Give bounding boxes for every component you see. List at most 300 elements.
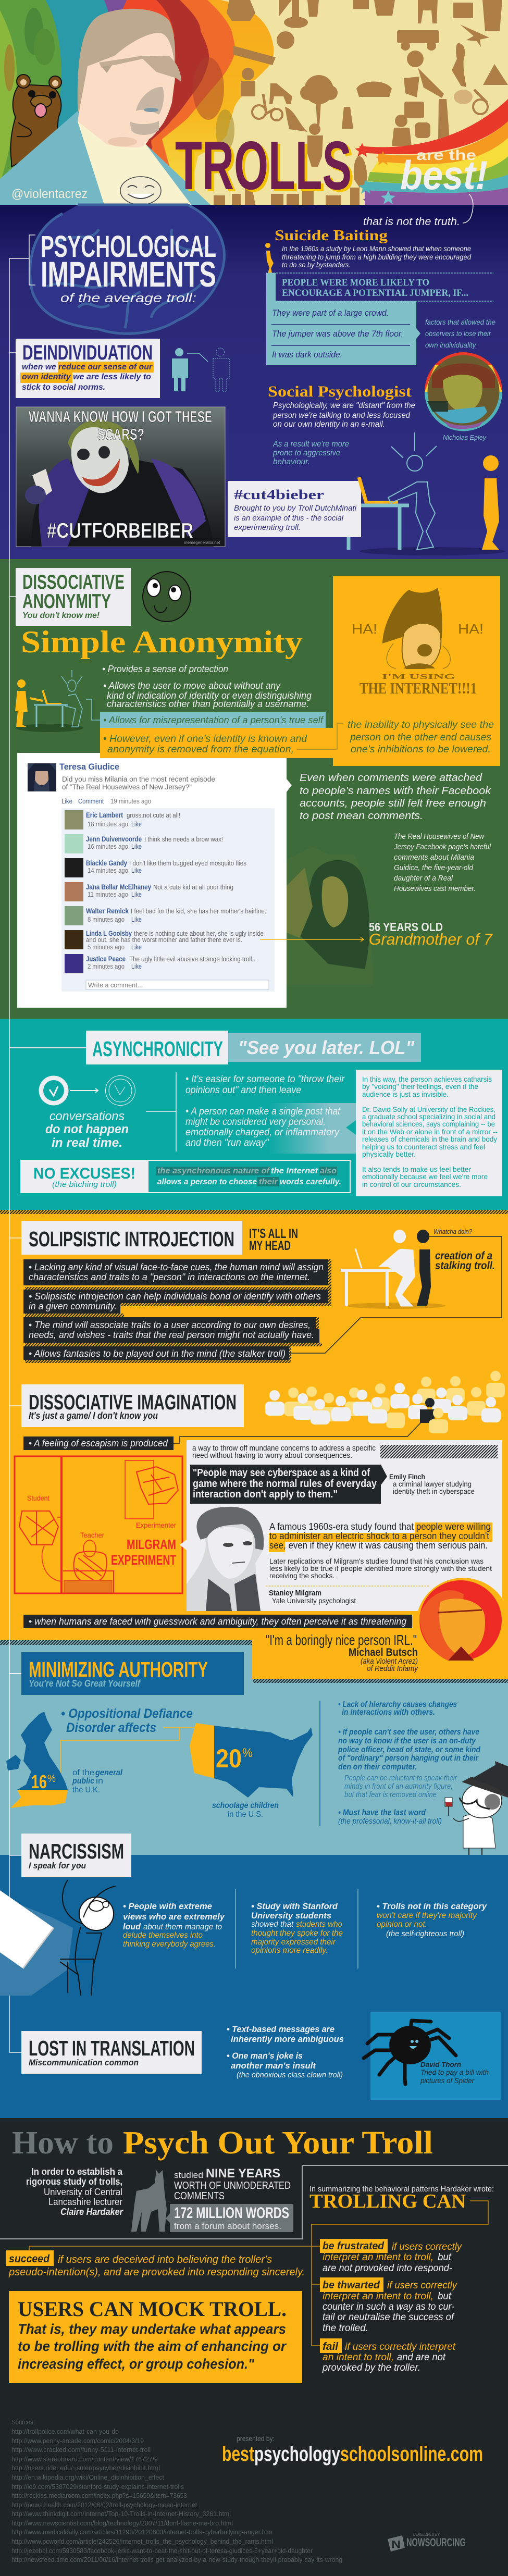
panel: asynchronicity heading: [9, 1031, 421, 1064]
text: oppositional defiance: Disorder affects: [66, 1720, 156, 1735]
panel: facebook comment screenshot: gross,not cute at all!: [127, 811, 180, 819]
text: be thwarted: tail or neutralise the success of: [323, 2312, 455, 2323]
text: narcissism column 1: views who are extremely: [123, 1912, 226, 1922]
text: be frustrated: if users correctly: [392, 2241, 462, 2252]
panel: bullets with gradient pointer: emotionally charged, or inflammatory: [185, 1127, 340, 1138]
text: sources: http://www.cracked.com/funny-5111-internet-troll: [11, 2446, 151, 2454]
panel: milgram study and quote: Yale University psychologist: [272, 1596, 356, 1605]
frame around study: [0, 2165, 508, 2239]
text: minimizing authority bullets: of "ordinary" person hanging out in their: [338, 1754, 479, 1763]
panel: toy silhouettes: [214, 0, 508, 205]
text: sources: Sources:: [11, 2418, 35, 2426]
text: succeed: if users are deceived into believing the troller's: [58, 2254, 272, 2265]
panel: catharsis note: it on the Web or alone in front of a mirror --: [362, 1128, 498, 1136]
panel: suicide baiting: ENCOURAGE A POTENTIAL JUMPER, IF...: [282, 288, 468, 299]
panel: facebook comment screenshot: of "The Real Housewives of New Jersey?": [62, 783, 192, 791]
portrait: Nicholas Epley: [425, 352, 502, 441]
logo: nowsourcing: N: [391, 2539, 401, 2550]
panel: asynchronicity heading: ASYNCHRONICITY: [92, 1037, 223, 1061]
heading: trolling can: In summarizing the behavioral patterns Hardaker wrote:: [309, 2185, 494, 2194]
text: sources: http://www.medicaldaily.com/articles/11293/20120803/internet-trolls-cyberbullying-anger.htm: [11, 2528, 272, 2536]
text: housewives note: [393, 832, 491, 893]
map: US 20 percent: %: [242, 1746, 253, 1760]
text: lost in translation bullets: (the obnoxious class clown troll): [237, 2071, 343, 2079]
panel: narcissism heading: I speak for you: [29, 1861, 86, 1871]
panel: milgram study and quote: Later replications of Milgram's studies found that his conclusion was: [269, 1557, 484, 1565]
panel: facebook comment screenshot: The ugly little evil abusive strange looking troll..: [129, 955, 255, 963]
title: Trolls are the best: best!: [400, 152, 488, 198]
header note: that is not the truth: [363, 194, 473, 228]
panel: milgram experiment diagram: Experimenter: [136, 1521, 176, 1529]
text: even when comments were attached: accounts, people still felt free enough: [300, 798, 486, 809]
icon: table flip meme: [0, 1880, 116, 1996]
panel: facebook comment screenshot: Linda L Goolsby: [86, 929, 132, 937]
text: fail: if users correctly interpret: [345, 2342, 456, 2352]
panel: facebook comment screenshot: Teresa Giudice: [59, 762, 119, 772]
text: narcissism column 2: thought they spoke for the: [251, 1929, 343, 1938]
timeline over teal: [9, 1019, 10, 1214]
icon: stalker at computer with connector: creation of a: [435, 1250, 492, 1262]
map: UK 16 percent: [6, 1712, 122, 1808]
map: UK 16 percent: the U.K.: [72, 1786, 100, 1794]
panel: lost in translation heading: LOST IN TRANSLATION: [29, 2036, 195, 2060]
panel: no excuses: [20, 1160, 350, 1193]
timeline over orange: [9, 1210, 10, 1640]
text: sources: http://jezebel.com/5930583/facebook-jerks-want-to-beat-the-shit-out-of-teresa-giudices-5+year+old-daughter: [11, 2547, 313, 2555]
panel: cut4bieber: Brought to you by Troll DutchMinati: [234, 504, 357, 513]
panel: facebook comment screenshot: Like: [131, 843, 142, 850]
panel: milgram study and quote: Stanley Milgram: [269, 1589, 321, 1597]
panel: milgram study and quote: interaction don't apply to them.": [193, 1489, 338, 1500]
panel: milgram study and quote: receiving the shocks.: [269, 1571, 334, 1580]
map: UK 16 percent: in: [96, 1777, 103, 1786]
callout: 56 years old grandmother of 7: 56 YEARS OLD: [369, 920, 443, 934]
text: be frustrated: interpret an intent to troll,: [323, 2252, 433, 2263]
text: minimizing authority bullets: but that fear is removed online: [344, 1790, 437, 1799]
text: study intro: University of Central: [44, 2187, 122, 2197]
text: nine years of comments: COMMENTS: [174, 2190, 225, 2202]
panel: users can mock troll: [9, 2291, 302, 2383]
re-draw of timeline line over green: [9, 559, 10, 1019]
panel: bullets with gradient pointer: opinions out" and then leave: [185, 1085, 301, 1096]
text: housewives note: comments about Milania: [394, 853, 474, 862]
panel: milgram study and quote: A famous 1960s-era study found that people were willing: [269, 1521, 491, 1532]
panel: facebook comment screenshot: 5 minutes ago: [88, 943, 125, 951]
panel: facebook comment screenshot: Write a comment...: [88, 981, 143, 989]
panel: deindividuation: when we reduce our sense of our: [22, 363, 153, 371]
text: be thwarted: be thwarted: [323, 2280, 380, 2291]
text: be thwarted: [320, 2277, 457, 2334]
map: US 20 percent: 20: [216, 1744, 242, 1773]
panel: solipsistic bullets: [23, 1259, 331, 1363]
text: simple anonymity bullets: characteristics other than potentially a username.: [107, 699, 309, 709]
section background: solipsistic introjection and dissociative imagination: [0, 1210, 508, 1679]
text: nine years of comments: studied: [174, 2170, 203, 2180]
panel: milgram study and quote: [180, 1440, 502, 1611]
text: sources: http://trollpolice.com/what-can-you-do: [11, 2428, 119, 2435]
text: minimizing authority bullets: police officer, head of state, or some kind: [338, 1745, 481, 1754]
text: nine years of comments: [166, 2166, 293, 2232]
text: minimizing authority bullets: [320, 1700, 481, 1826]
panel: no excuses: words carefully.: [280, 1178, 341, 1186]
panel: suicide baiting: factors that allowed the: [425, 318, 495, 326]
text: housewives note: Jersey Facebook page's hateful: [393, 843, 491, 851]
panel: facebook comment screenshot: Jenn Duivenvoorde: [86, 835, 142, 843]
text: even when comments were attached: to people's names with their Facebook: [300, 785, 491, 797]
text: study intro: Claire Hardaker: [60, 2207, 123, 2217]
panel: facebook comment screenshot: [17, 753, 292, 1008]
panel: solipsistic bullets: characteristics and traits to a "person" in interactions on the internet.: [29, 1272, 310, 1282]
panel: suicide baiting: In the 1960s a study by Leon Mann showed that when someone: [282, 244, 471, 253]
text: conversations do not happen in real time: conversations: [49, 1109, 125, 1123]
panel: allows misrepresentation strip: • Allows for misrepresentation of a person's true self: [103, 715, 324, 725]
panel: milgram study and quote: identity theft in cyberspace: [393, 1487, 475, 1495]
text: narcissism column 1: [123, 1901, 226, 1949]
panel: lost in translation heading: [21, 2031, 202, 2074]
portrait: man with glasses: [0, 9, 210, 205]
text: be thwarted: counter in such a way as to cur-: [323, 2301, 454, 2312]
panel: catharsis note: in control of our circumstances.: [362, 1180, 461, 1188]
map: UK 16 percent: %: [47, 1773, 56, 1785]
panel: narcissism heading: NARCISSISM: [29, 1839, 124, 1863]
timeline over dark blue: [9, 1855, 21, 2052]
logo: nowsourcing: [388, 2532, 466, 2552]
header background: [0, 0, 508, 205]
text: narcissism column 2: University students: [251, 1911, 331, 1921]
heading: simple anonymity: Simple Anonymity: [21, 625, 303, 659]
map: US 20 percent: [190, 1723, 313, 1819]
panel: spider: Tried to pay a bill with: [420, 2068, 489, 2076]
icon: like a sir gentleman: [445, 1761, 508, 1855]
text: housewives note: Housewives cast member.: [394, 884, 476, 893]
panel: solipsistic bullets: • Solipsistic introjection can help individuals bond or identify with others: [29, 1291, 321, 1302]
section heading: psychological impairments: [29, 230, 216, 305]
panel: suicide baiting: Suicide Baiting: [275, 227, 388, 244]
panel: catharsis note: audience is just as invisible.: [362, 1090, 449, 1098]
icon: scribble meme face: [143, 572, 191, 622]
panel: catharsis note: behavioral sciences, says complaining -- be: [362, 1120, 495, 1128]
text: even when comments were attached: Even when comments were attached: [300, 772, 482, 784]
panel: minimizing authority heading: MINIMIZING AUTHORITY: [29, 1657, 208, 1681]
text: be frustrated: be frustrated: [323, 2240, 385, 2252]
panel: rainbow behind portrait: [0, 0, 274, 205]
text: narcissism column 2: students who: [296, 1920, 342, 1929]
panel: dissociative imagination heading: DISSOCIATIVE IMAGINATION: [29, 1390, 237, 1414]
panel: facebook comment screenshot: 14 minutes ago: [88, 866, 128, 874]
panel: catharsis note: by "voicing" their feelings, even if the: [362, 1082, 478, 1091]
panel: users can mock troll: That is, they may undertake what appears: [18, 2321, 286, 2337]
panel: facebook comment screenshot: Comment: [78, 797, 104, 805]
quote: Michael Butsch: "I'm a boringly nice person IRL.": [266, 1632, 417, 1648]
map: US 20 percent: in the U.S.: [228, 1810, 263, 1819]
panel: dissociative anonymity heading: [9, 568, 131, 626]
panel: deindividuation: stick to social norms.: [22, 383, 105, 392]
panel: cut4bieber: #cut4bieber: [234, 487, 324, 502]
text: housewives note: daughter of a Real: [394, 874, 453, 883]
panel: dissociative imagination heading: It's just a game/ I don't know you: [29, 1410, 158, 1421]
panel: facebook comment screenshot: 18 minutes ago: [88, 820, 128, 828]
panel: milgram study and quote: to administer an electric shock to a person they couldn't: [269, 1531, 489, 1541]
panel: cut4bieber: [228, 481, 361, 537]
panel: deindividuation: own identity we are less likely to: [22, 373, 151, 381]
panel: asynchronicity heading: "See you later. LOL": [238, 1037, 415, 1058]
callout: 56 years old grandmother of 7: Grandmother of 7: [369, 930, 493, 948]
text: minimizing authority bullets: minds in front of an authority figure,: [344, 1782, 453, 1791]
text: minimizing authority bullets: (the professorial, know-it-all troll): [338, 1817, 442, 1826]
map: US 20 percent: schoolage children: [212, 1801, 279, 1810]
panel: facebook comment screenshot: Like: [131, 915, 142, 923]
portrait: Michael Butsch: [416, 1578, 508, 1679]
text: sources: [11, 2418, 342, 2563]
portrait: Nicholas Epley: Nicholas Epley: [443, 434, 487, 441]
text: narcissism column 2: showed that: [251, 1920, 294, 1929]
panel: facebook comment screenshot: 16 minutes ago: [88, 843, 128, 850]
panel: no excuses: their: [259, 1178, 278, 1186]
logo: bestpsychologyschoolsonline.com: presented by:: [237, 2434, 275, 2443]
text: succeed: [6, 2250, 305, 2278]
handle text: @violentacrez: [11, 187, 88, 201]
panel: milgram study and quote: game where the normal rules of everyday: [193, 1478, 377, 1490]
text: study intro: Lancashire lecturer: [48, 2197, 122, 2207]
panel: spider: David Thorn: [420, 2060, 461, 2069]
text: conversations do not happen in real time: do not happen: [45, 1122, 129, 1136]
panel: solipsistic heading: MY HEAD: [249, 1239, 291, 1253]
text: narcissism column 1: thinking everybody agrees.: [123, 1940, 216, 1949]
panel: social psychologist: person we're talking to and less focused: [272, 411, 411, 420]
panel: facebook comment screenshot: Justice Peace: [86, 955, 126, 963]
quote: Michael Butsch: [266, 1632, 418, 1673]
panel: facebook comment screenshot: Like: [131, 890, 142, 898]
panel: facebook comment screenshot: 8 minutes ago: [88, 915, 125, 923]
panel: solipsistic heading: IT'S ALL IN: [249, 1227, 298, 1241]
icon: solid and dashed person: [172, 348, 229, 391]
panel: facebook comment screenshot: I feel bad for the kid, she has her mother's hairline.: [131, 907, 266, 915]
panel: solipsistic heading: [9, 1221, 298, 1255]
text: sources: http://www.stereoboard.com/content/view/176727/9: [11, 2455, 158, 2463]
panel: facebook comment screenshot: 19 minutes ago: [110, 797, 151, 805]
panel: facebook comment screenshot: Walter Remick: [86, 907, 129, 915]
panel: deindividuation: [9, 339, 160, 398]
text: minimizing authority bullets: in interactions with others.: [342, 1708, 435, 1717]
text: nine years of comments: from a forum about horses.: [174, 2221, 281, 2231]
text: housewives note: The Real Housewives of New: [394, 832, 485, 841]
section heading: psychological impairments: of the average troll:: [60, 291, 196, 305]
text: be thwarted: interpret an intent to troll,: [323, 2291, 433, 2302]
text: lost in translation bullets: • One man's joke is: [227, 2051, 303, 2061]
text: narcissism column 3: won't care if they're majority: [377, 1911, 477, 1920]
title: Trolls are the best: are the: [416, 147, 476, 163]
hatch stripes: [0, 1640, 508, 1683]
text: sources: http://io9.com/5387029/stanford-study-explains-internet-trolls: [11, 2483, 184, 2491]
text: housewives note: Guidice, the five-year-old: [394, 863, 474, 872]
quote: Michael Butsch: of Reddit Infamy: [367, 1664, 418, 1673]
section background: narcissism: [0, 1855, 508, 2118]
panel: facebook comment screenshot: 2 minutes ago: [88, 962, 125, 970]
panel: catharsis note: physically better.: [362, 1150, 416, 1158]
icon: stalker at computer with connector: stalking troll.: [435, 1260, 495, 1272]
section background: how to psych out: [0, 2118, 508, 2576]
panel: cut4bieber: experimenting troll.: [234, 523, 301, 532]
text: narcissism column 2: majority expressed their: [251, 1938, 336, 1947]
panel: facebook comment screenshot: Did you miss Milania on the most recent episode: [62, 775, 215, 783]
logo: bestpsychologyschoolsonline.com: best: [222, 2443, 254, 2466]
panel: solipsistic bullets: • The mind will associate traits to a user according to our own desires,: [29, 1320, 311, 1330]
panel: facebook comment screenshot: Like: [131, 962, 142, 970]
text: minimizing authority bullets: • Must have the last word: [338, 1807, 426, 1817]
panel: I'm using the internet meme: person on the other end causes: [350, 732, 492, 743]
text: lost in translation bullets: another man's insult: [231, 2061, 316, 2071]
heading: how to psych out your troll: How to: [12, 2125, 114, 2161]
text: sources: http://www.penny-arcade.com/comic/2004/3/19: [11, 2437, 144, 2445]
panel: suicide baiting: threatening to jump from a high building they were encouraged: [282, 253, 472, 261]
panel: I'm using the internet meme: [296, 576, 500, 766]
image: joker meme: WANNA KNOW HOW I GOT THESE: [29, 407, 212, 426]
text: succeed: pseudo-intention(s), and are provoked into responding sincerely.: [8, 2267, 305, 2278]
section background: minimizing authority left part: [0, 1640, 252, 1683]
panel: solipsistic bullets: • Allows fantasies to be played out in the mind (the stalker troll): [29, 1348, 286, 1359]
panel: spider: [364, 2012, 501, 2100]
text: succeed: succeed: [9, 2253, 50, 2265]
panel: milgram study and quote: a way to throw off mundane concerns to address a specific: [192, 1444, 376, 1453]
icon: crowd of people: [265, 1371, 505, 1433]
icon: computer and bystander small: [15, 670, 100, 732]
panel: suicide baiting: own individuality.: [425, 341, 477, 349]
panel: escapism bullet: [23, 1422, 421, 1450]
panel: milgram study and quote: Emily Finch: [389, 1472, 425, 1481]
text: lost in translation bullets: • Text-based messages are: [227, 2024, 334, 2034]
icon: brain: [30, 205, 224, 333]
panel: dissociative anonymity heading: ANONYMITY: [22, 590, 111, 613]
text: sources: http://users.rider.edu/~suler/psycyber/disinhibit.html: [11, 2464, 160, 2472]
panel: catharsis note: a graduate school specializing in social and: [362, 1112, 495, 1121]
panel: milgram study and quote: see, even if they knew it was causing them serious pain.: [269, 1540, 488, 1551]
text: minimizing authority bullets: den on their computer.: [338, 1763, 417, 1772]
panel: dissociative imagination heading: [9, 1384, 244, 1427]
panel: cut4bieber: is an example of this - the social: [234, 514, 344, 523]
panel: social psychologist: prone to aggressive: [272, 449, 340, 457]
quote: Michael Butsch: (aka Violent Acrez): [361, 1657, 418, 1666]
text: sources: http://www.newscientist.com/blog/technology/2007/11/dont-flame-me-bro.html: [11, 2519, 233, 2527]
map: UK 16 percent: 16: [31, 1771, 47, 1792]
image: joker meme: #CUTFORBEIBER: [47, 518, 193, 542]
panel: milgram experiment diagram: MILGRAM: [127, 1537, 176, 1552]
heading: how to psych out your troll: [12, 2125, 433, 2161]
panel: minimizing authority heading: [9, 1652, 244, 1695]
panel: no excuses: the Internet: [271, 1167, 318, 1175]
text: fail: [320, 2338, 456, 2373]
panel: catharsis note: It also tends to make us feel better: [362, 1165, 471, 1173]
panel: catharsis note: [356, 1070, 502, 1196]
panel: I'm using the internet meme: the inability to physically see the: [348, 720, 494, 730]
panel: milgram experiment diagram: Student: [27, 1494, 49, 1502]
text: be thwarted: but: [438, 2291, 452, 2302]
text: be frustrated: but: [438, 2252, 452, 2263]
panel: no excuses: NO EXCUSES!: [33, 1165, 135, 1182]
text: lost in translation bullets: [227, 2024, 344, 2079]
text: simple anonymity bullets: • Provides a sense of protection: [102, 664, 228, 674]
text: conversations do not happen in real time: [45, 1109, 129, 1150]
panel: suicide baiting: [265, 227, 495, 365]
panel: I'm using the internet meme: THE INTERNET!!!1: [360, 679, 477, 697]
panel: bullets with gradient pointer: and then "run away": [185, 1137, 269, 1148]
text: narcissism column 3: (the self-righteous troll): [386, 1929, 464, 1938]
icon: troll face on shirt: [120, 177, 161, 205]
text: simple anonymity bullets: kind of indication of identity or even distinguishing: [107, 690, 312, 701]
panel: I'm using the internet meme: HA!: [458, 621, 484, 637]
text: be frustrated: [320, 2239, 462, 2274]
panel: dissociative anonymity heading: DISSOCIATIVE: [22, 571, 125, 593]
panel: bullets with gradient pointer: • A person can make a single post that: [185, 1106, 341, 1117]
panel: dissociative anonymity heading: You don't know me!: [22, 611, 100, 620]
image: joker meme: SCARS?: [97, 425, 144, 443]
panel: no excuses: also: [320, 1167, 337, 1175]
panel: facebook comment screenshot: Like: [131, 820, 142, 828]
text: fail: an intent to troll,: [323, 2352, 394, 2363]
panel: solipsistic bullets: needs, and wishes - traits that the real person might not actually have.: [29, 1330, 314, 1340]
logo: bestpsychologyschoolsonline.com: psychology: [254, 2443, 341, 2466]
text: study intro: [26, 2166, 123, 2217]
panel: milgram study and quote: need without having to worry about consequences.: [192, 1451, 352, 1460]
section background: psychological impairments: [0, 205, 508, 559]
text: nine years of comments: 172 MILLION WORDS: [174, 2205, 289, 2222]
text: oppositional defiance: [60, 1706, 196, 1790]
portrait: grandmother: [287, 847, 373, 985]
text: narcissism column 3: opinion or not.: [377, 1920, 427, 1929]
timeline line: [9, 258, 29, 2052]
panel: catharsis note: In this way, the person achieves catharsis: [362, 1075, 492, 1083]
panel: facebook comment screenshot: I think she needs a brow wax!: [144, 835, 223, 843]
panel: facebook comment screenshot: Like: [131, 866, 142, 874]
panel: milgram study and quote: a criminal lawyer studying: [393, 1480, 472, 1488]
text: even when comments were attached: [300, 772, 491, 822]
icon: stalker at computer with connector: Whatcha doin?: [433, 1228, 473, 1235]
text: oppositional defiance: • Oppositional Defiance: [61, 1706, 193, 1721]
panel: facebook comment screenshot: Jana Bellar McElhaney: [86, 883, 151, 891]
title: Trolls are the best: TROLLS: [175, 127, 352, 204]
panel: no excuses: (the bitching troll): [52, 1180, 117, 1189]
panel: no excuses: the asynchronous nature of: [157, 1167, 270, 1175]
panel: catharsis note: releases of chemicals in the brain and body: [362, 1135, 497, 1143]
text: simple anonymity bullets: [102, 664, 312, 709]
quote: Michael Butsch: Michael Butsch: [349, 1646, 418, 1658]
panel: social psychologist: Psychologically, we are "distant" from the: [273, 401, 415, 410]
heading: trolling can: [29, 2185, 494, 2346]
icon: stalker at computer with connector: [289, 1228, 502, 1353]
panel: suicide baiting: to do so by bystanders.: [282, 261, 351, 269]
panel: facebook comment screenshot: Like: [61, 797, 72, 805]
text: minimizing authority bullets: People can be reluctant to speak their: [344, 1774, 457, 1782]
timeline over light blue: [9, 1640, 10, 1855]
panel: solipsistic bullets: in a given community.: [29, 1301, 117, 1311]
panel: allows misrepresentation strip: • However, even if one's identity is known and: [103, 734, 307, 745]
text: narcissism column 3: • Trolls not in this category: [377, 1901, 487, 1911]
bullet: humans faced with guesswork: • when humans are faced with guesswork and ambiguity, they often perceive it as threatening: [29, 1616, 406, 1627]
logo: nowsourcing: DEVELOPED BY: [413, 2532, 440, 2537]
panel: milgram study and quote: less likely to be true if people identified more strongly with the student: [269, 1564, 492, 1572]
text: narcissism column 1: about them manage to: [143, 1923, 222, 1931]
panel: catharsis note: helping us to counteract stress and feel: [362, 1143, 485, 1151]
panel: suicide baiting: It was dark outside.: [272, 350, 342, 360]
panel: narcissism heading: [9, 1834, 131, 1877]
text: fail: fail: [323, 2341, 338, 2352]
section background: minimizing authority: [0, 1679, 508, 1855]
text: study intro: rigorous study of trolls,: [26, 2176, 122, 2187]
hatch stripe: [0, 1210, 508, 1214]
text: sources: http://en.wikipedia.org/wiki/Online_disinhibition_effect: [11, 2473, 164, 2481]
text: nine years of comments: NINE YEARS: [206, 2166, 280, 2181]
panel: milgram experiment diagram: [15, 1456, 182, 1593]
panel: milgram study and quote: "People may see cyberspace as a kind of: [193, 1467, 370, 1479]
